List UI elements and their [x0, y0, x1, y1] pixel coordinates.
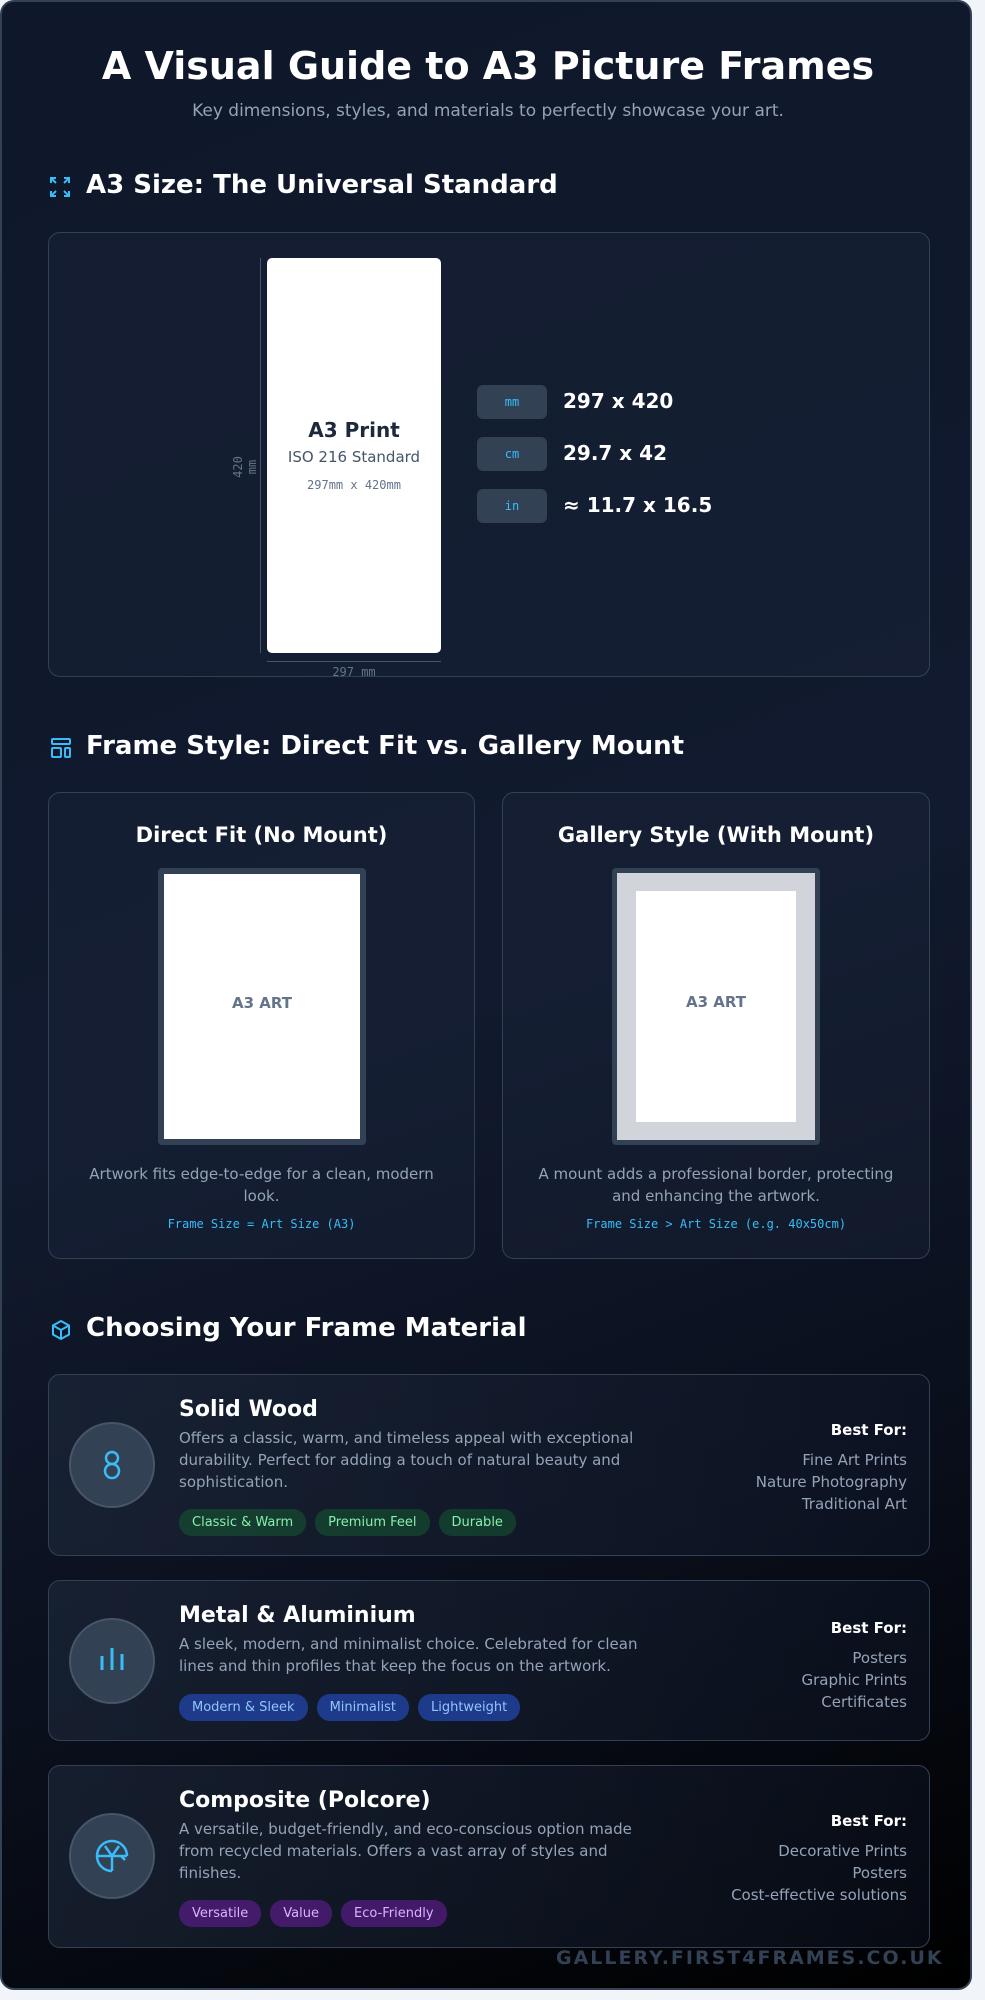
heading: frame style: Frame Style: Direct Fit vs. Gallery Mount: [86, 731, 684, 761]
label 420 mm: [231, 456, 259, 478]
card: composite: Cost-effective solutions: [731, 1886, 907, 1904]
unit in: [477, 489, 547, 523]
dimension line vertical: [260, 258, 261, 653]
card: metal: Certificates: [821, 1693, 907, 1711]
card: composite: Composite (Polcore): [179, 1788, 431, 1813]
frame: gallery: [612, 868, 820, 1145]
card: composite: Posters: [852, 1864, 907, 1882]
icon: layout: [51, 738, 71, 758]
unit in: in: [505, 499, 519, 513]
label 420 mm: mm: [245, 460, 259, 474]
footer watermark: GALLERY.FIRST4FRAMES.CO.UK: [556, 1947, 944, 1969]
subtitle: Key dimensions, styles, and materials to perfectly showcase your art.: [192, 101, 784, 121]
card: composite: Value: [283, 1906, 319, 1921]
label 420 mm: 420: [231, 456, 245, 478]
card: metal: Posters: [852, 1649, 907, 1667]
frame: direct: A3 ART: [232, 994, 292, 1012]
card: metal: [48, 1580, 930, 1741]
dimension line horizontal: [267, 661, 441, 662]
card: solid wood: [48, 1374, 930, 1556]
card: metal: A sleek, modern, and minimalist choice. Celebrated for clean lines and thin profiles that keep the focus on the artwork.: [179, 1635, 637, 1675]
card: metal: Best For:: [831, 1619, 907, 1637]
main card: 297 x 420: [563, 389, 673, 413]
title: A Visual Guide to A3 Picture Frames: [102, 44, 874, 88]
main card: 29.7 x 42: [563, 441, 667, 465]
card: solid wood: Fine Art Prints: [802, 1451, 907, 1469]
icon: composite: [69, 1813, 155, 1899]
heading: A3 size: A3 Size: The Universal Standard: [86, 170, 558, 200]
card: solid wood: Premium Feel: [328, 1515, 416, 1530]
heading: materials: Choosing Your Frame Material: [86, 1313, 526, 1343]
panel: gallery: Frame Size > Art Size (e.g. 40x50cm): [586, 1217, 846, 1231]
panel: gallery: Gallery Style (With Mount): [558, 823, 874, 847]
card: composite: Versatile: [192, 1906, 248, 1921]
panel: direct fit: [48, 792, 475, 1259]
card: solid wood: Nature Photography: [756, 1473, 907, 1491]
card: solid wood: Classic & Warm: [192, 1515, 293, 1530]
card: composite: A versatile, budget-friendly, and eco-conscious option made from recycled materials. Offers a vast array of styles and finishes.: [179, 1820, 632, 1882]
A3 print: A3 Print: [308, 418, 400, 442]
unit mm: [477, 385, 547, 419]
icon: wood: [69, 1422, 155, 1508]
A3 print: ISO 216 Standard: [288, 448, 420, 466]
icon: metal: [69, 1618, 155, 1704]
card: solid wood: Durable: [452, 1515, 503, 1530]
unit mm: mm: [505, 395, 519, 409]
card: metal: Minimalist: [330, 1700, 396, 1715]
frame: direct: [158, 868, 366, 1145]
icon: expand: [50, 177, 70, 197]
icon: cube: [52, 1320, 70, 1340]
card: solid wood: Best For:: [831, 1421, 907, 1439]
panel: gallery: [502, 792, 930, 1259]
panel: A3 size: [48, 232, 930, 677]
card: solid wood: Traditional Art: [802, 1495, 907, 1513]
card: composite: Best For:: [831, 1812, 907, 1830]
panel: direct fit: Frame Size = Art Size (A3): [168, 1217, 355, 1231]
A3 print: [267, 258, 441, 653]
label 297 mm: 297 mm: [332, 665, 376, 679]
panel: gallery: A mount adds a professional border, protecting and enhancing the artwork.: [539, 1165, 893, 1205]
card: composite: Eco-Friendly: [354, 1906, 434, 1921]
unit cm: cm: [505, 447, 519, 461]
unit cm: [477, 437, 547, 471]
card: metal: Graphic Prints: [801, 1671, 907, 1689]
card: composite: [48, 1765, 930, 1948]
frame: gallery: A3 ART: [686, 993, 746, 1011]
card: metal: Metal & Aluminium: [179, 1603, 416, 1628]
main card: ≈ 11.7 x 16.5: [563, 493, 712, 517]
card: solid wood: Offers a classic, warm, and timeless appeal with exceptional durability. Perfect for adding a touch of natural beauty and sophistication.: [179, 1429, 633, 1491]
A3 print: 297mm x 420mm: [307, 478, 401, 492]
card: metal: Modern & Sleek: [192, 1700, 295, 1715]
panel: direct fit: Artwork fits edge-to-edge for a clean, modern look.: [89, 1165, 434, 1205]
card: solid wood: Solid Wood: [179, 1397, 318, 1422]
card: composite: Decorative Prints: [778, 1842, 907, 1860]
panel: direct fit: Direct Fit (No Mount): [136, 823, 387, 847]
card: metal: Lightweight: [431, 1700, 507, 1715]
